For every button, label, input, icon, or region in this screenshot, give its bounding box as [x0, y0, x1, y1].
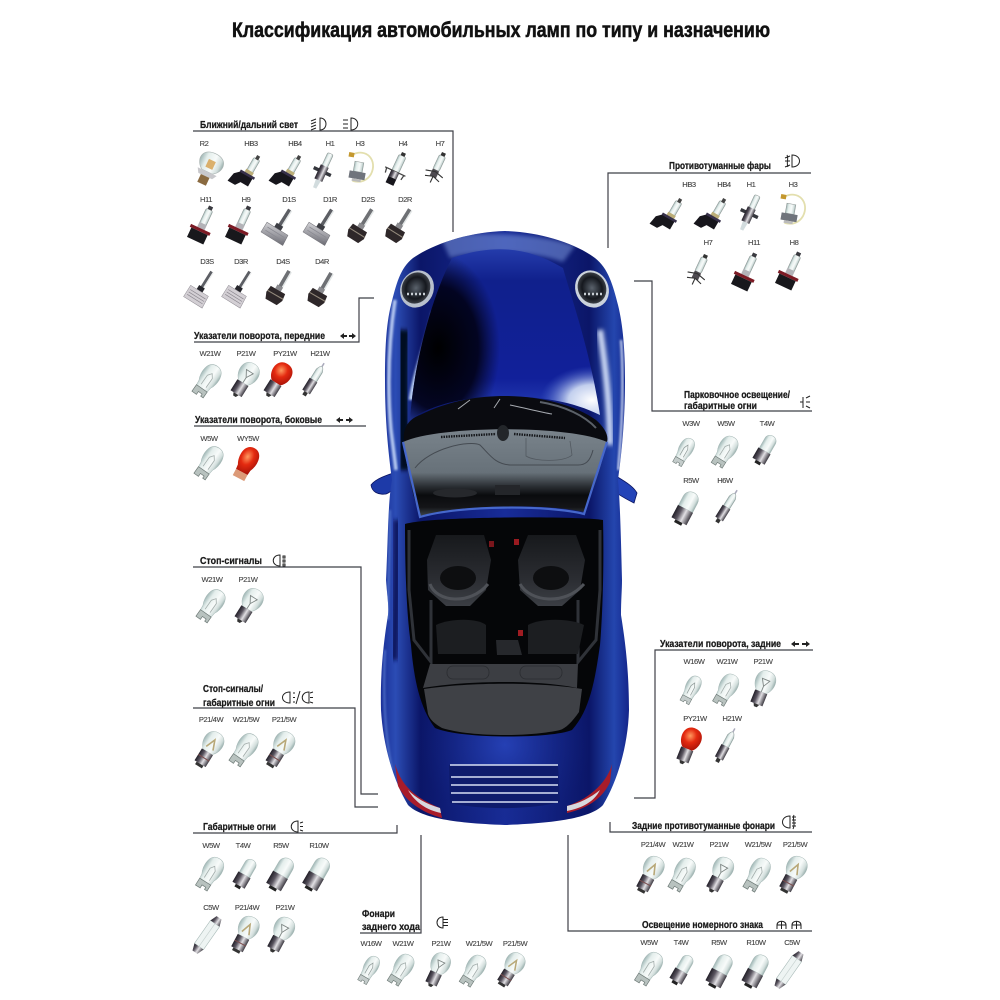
- cabin side sills: [409, 530, 600, 662]
- front seat right: [518, 535, 585, 606]
- bulb P21/4W: [632, 840, 668, 897]
- heading: brake and position lights: Стоп-сигналы/: [203, 684, 263, 695]
- bulb H6W: H6W: [717, 476, 734, 485]
- bulb W21W: W21W: [393, 939, 415, 948]
- bulb HB4: HB4: [288, 139, 302, 148]
- panel: rear turn signals: [634, 639, 813, 798]
- panel: parking and position lights: [634, 281, 812, 528]
- bulb D2R: D2R: [398, 195, 413, 204]
- bulb H7: H7: [704, 238, 713, 247]
- bulb H7: H7: [436, 139, 445, 148]
- bulb W21W: [710, 657, 742, 708]
- bulb R2: [190, 139, 227, 189]
- bulb H21W: [713, 714, 743, 764]
- bulb R2: R2: [200, 139, 209, 148]
- bulb P21W: [702, 840, 737, 897]
- bulb H6W: [713, 476, 741, 525]
- bulb H1: H1: [326, 139, 335, 148]
- bulb W21W: W21W: [200, 349, 222, 358]
- bulb W5W: [632, 938, 667, 988]
- heading: brake lights: Стоп-сигналы: [200, 556, 262, 567]
- bulb D4S: D4S: [276, 257, 290, 266]
- bulb D1S: [261, 195, 301, 246]
- bulb H3: H3: [789, 180, 798, 189]
- icon: turn arrows: [340, 333, 356, 339]
- bulb W21W: [385, 939, 418, 988]
- bulb HB3: [650, 180, 696, 235]
- cowl and wipers: [404, 396, 607, 442]
- bulb D3S: D3S: [200, 257, 214, 266]
- bulb P21W: P21W: [432, 939, 452, 948]
- car illustration, top view: [371, 231, 637, 825]
- bulb D3R: D3R: [234, 257, 249, 266]
- tail light right: [567, 764, 612, 813]
- bulb P21W: [421, 939, 454, 991]
- bulb H21W: [300, 349, 331, 398]
- bulb P21/4W: [190, 715, 228, 772]
- heading: reverse lights: [362, 909, 420, 933]
- bulb H8: [773, 238, 809, 291]
- bulb P21W: [226, 349, 263, 402]
- bulb P21W: P21W: [754, 657, 774, 666]
- panel: low and high beam: [184, 118, 453, 309]
- bulb T4W: [668, 938, 696, 987]
- bulb T4W: T4W: [236, 841, 252, 850]
- bulb W5W: [193, 841, 228, 893]
- bulb W21W: W21W: [673, 840, 695, 849]
- bulb HB3: HB3: [244, 139, 258, 148]
- bulb H7: [684, 238, 715, 288]
- bulb W21W: W21W: [202, 575, 224, 584]
- connector line: [360, 835, 421, 933]
- bulb W5W: W5W: [202, 841, 221, 850]
- connector line: [194, 425, 366, 427]
- panel: reverse lights: [356, 835, 529, 991]
- bulb W16W: [678, 657, 706, 706]
- bulb W21/5W: W21/5W: [233, 715, 260, 724]
- heading: reverse lights: заднего хода: [362, 922, 420, 933]
- icon: parking lamp: [800, 396, 810, 408]
- heading: reverse lights: Фонари: [362, 909, 395, 920]
- bulb D4R: D4R: [315, 257, 330, 266]
- windshield dash detail: [415, 425, 593, 498]
- bulb D3S: [184, 257, 221, 308]
- bulb H7: [422, 139, 453, 186]
- bulb W21/5W: [457, 939, 493, 989]
- connector line: [194, 298, 374, 342]
- bulb H9: H9: [242, 195, 251, 204]
- bulb T4W: T4W: [760, 419, 776, 428]
- bulb P21/5W: P21/5W: [783, 840, 808, 849]
- bulb W16W: W16W: [684, 657, 706, 666]
- bulb D3R: [222, 257, 259, 308]
- panel: fog lights: [608, 155, 811, 292]
- rear deck panel: [423, 664, 578, 688]
- bulb W21W: W21W: [717, 657, 739, 666]
- panel: side turn signals: [192, 414, 366, 483]
- bulb W3W: W3W: [682, 419, 701, 428]
- bulb PY21W: PY21W: [683, 714, 708, 723]
- bulb WY5W: [230, 434, 263, 483]
- icon: turn arrows: [336, 417, 353, 423]
- rear seats: [436, 539, 584, 655]
- heading: brake and position lights: габаритные огни: [203, 697, 275, 709]
- bulb R10W: R10W: [309, 841, 330, 850]
- bulb P21/4W: P21/4W: [641, 840, 666, 849]
- body reflections: [384, 234, 622, 820]
- icon: turn arrows: [791, 641, 810, 647]
- bulb HB4: HB4: [717, 180, 731, 189]
- bulb W21/5W: W21/5W: [745, 840, 772, 849]
- bulb H4: [379, 139, 414, 189]
- bulb W5W: W5W: [717, 419, 736, 428]
- bulb PY21W: [259, 349, 298, 402]
- heading: parking and position lights: Парковочное освещение/: [684, 390, 790, 401]
- heading: front turn signals: Указатели поворота, передние: [194, 331, 325, 342]
- bulb H11: H11: [748, 238, 760, 247]
- bulb W21/5W: W21/5W: [466, 939, 493, 948]
- bulb W5W: [709, 419, 742, 470]
- bulb P21/4W: P21/4W: [199, 715, 224, 724]
- connector line: [634, 281, 812, 411]
- bulb D1R: D1R: [323, 195, 338, 204]
- bulb R5W: R5W: [711, 938, 728, 947]
- bulb H8: H8: [790, 238, 799, 247]
- headlight right: [569, 265, 615, 313]
- panel: brake and position lights: [190, 684, 378, 807]
- bulb H9: [223, 195, 259, 245]
- bulb P21/5W: [775, 840, 811, 897]
- bulb R5W: R5W: [273, 841, 290, 850]
- bulb W3W: [671, 419, 701, 468]
- bulb H1: H1: [747, 180, 756, 189]
- bulb D2R: [383, 195, 418, 245]
- bulb HB4: [694, 180, 731, 235]
- bulb C5W: [772, 938, 806, 990]
- bulb D4S: [263, 257, 297, 307]
- bulb H1: [306, 139, 339, 192]
- bulb C5W: C5W: [203, 903, 220, 912]
- bulb R5W: [704, 938, 736, 991]
- bulb R5W: R5W: [683, 476, 700, 485]
- bulb T4W: [751, 419, 779, 467]
- icon: rear fog lamp: [782, 815, 796, 829]
- connector line: [193, 825, 397, 833]
- panel: license plate lights: [568, 835, 812, 991]
- bulb R10W: [740, 938, 772, 991]
- bulb H3: [776, 180, 807, 226]
- bulb C5W: [190, 903, 224, 955]
- heading: parking and position lights: габаритные огни: [684, 400, 757, 412]
- bulb P21W: [263, 903, 298, 957]
- bulb P21/5W: P21/5W: [272, 715, 297, 724]
- icon: high beam: [343, 118, 358, 130]
- bulb W21/5W: [740, 840, 774, 894]
- tonneau cover: [424, 684, 582, 735]
- heading: license plate lights: Освещение номерного знака: [642, 920, 763, 931]
- cabin: [405, 517, 603, 737]
- connector line: [193, 567, 378, 794]
- title: Классификация автомобильных ламп по типу и назначению: [232, 19, 770, 42]
- bulb P21W: P21W: [276, 903, 296, 912]
- engine vent: [449, 765, 560, 808]
- heading: side turn signals: Указатели поворота, боковые: [195, 414, 322, 426]
- heading: rear turn signals: Указатели поворота, задние: [660, 639, 781, 650]
- hood: [410, 249, 600, 418]
- bulb HB4: [269, 139, 306, 192]
- icon: fog lamp: [785, 155, 800, 167]
- bulb P21/5W: P21/5W: [503, 939, 528, 948]
- panel: rear fog lights: [610, 815, 812, 897]
- bulb P21W: [746, 657, 779, 710]
- bulb WY5W: WY5W: [237, 434, 260, 443]
- bulb D1S: D1S: [282, 195, 296, 204]
- bulb D1R: [303, 195, 343, 246]
- bulb PY21W: [672, 714, 708, 767]
- bulb D4R: [305, 257, 339, 309]
- bulb H3: [344, 139, 375, 184]
- bulb C5W: C5W: [784, 938, 801, 947]
- connector line: [193, 708, 378, 807]
- bulb P21W: P21W: [239, 575, 259, 584]
- bulb P21/5W: [493, 939, 529, 991]
- bulb R10W: [301, 841, 333, 894]
- connector line: [610, 822, 812, 832]
- tail light left: [395, 764, 442, 818]
- bulb H21W: H21W: [310, 349, 331, 358]
- heading: fog lights: Противотуманные фары: [669, 160, 771, 172]
- connector line: [634, 650, 813, 798]
- bulb H11: H11: [200, 195, 212, 204]
- bulb T4W: [231, 841, 259, 891]
- icon: plate lamps: [777, 921, 801, 929]
- bulb H21W: H21W: [722, 714, 743, 723]
- connector line: [193, 131, 453, 232]
- bulb HB3: [228, 139, 265, 192]
- bulb P21/4W: P21/4W: [235, 903, 260, 912]
- bulb D2S: D2S: [361, 195, 375, 204]
- connector line: [568, 835, 812, 931]
- headlight left: [394, 265, 440, 313]
- icon: brake and position lamp: [282, 691, 313, 704]
- bulb W21/5W: [227, 715, 262, 769]
- bulb W21W: [665, 840, 699, 894]
- bulb W21W: [194, 575, 229, 625]
- connector line: [608, 173, 811, 248]
- bulb W5W: [192, 434, 227, 482]
- heading: brake and position lights: [203, 684, 275, 709]
- bulb R5W: [265, 841, 297, 894]
- icon: reverse lamp: [437, 917, 448, 928]
- heading: rear fog lights: Задние противотуманные фонари: [632, 820, 775, 832]
- bulb PY21W: PY21W: [273, 349, 298, 358]
- car body: [381, 231, 629, 825]
- bulb R10W: R10W: [746, 938, 767, 947]
- front seat left: [427, 535, 491, 606]
- windshield: [403, 429, 607, 516]
- bulb H11: [729, 238, 765, 292]
- left mirror: [371, 470, 403, 494]
- panel: position lights: [190, 821, 397, 957]
- bulb W21W: [190, 349, 225, 400]
- windshield frame: [403, 442, 607, 517]
- icon: low beam: [311, 118, 326, 130]
- bulb P21/4W: [227, 903, 263, 957]
- bulb HB3: HB3: [682, 180, 696, 189]
- icon: brake lamp: [273, 555, 285, 566]
- bulb W5W: W5W: [200, 434, 219, 443]
- heading: low and high beam: Ближний/дальний свет: [200, 120, 298, 131]
- bulb H3: H3: [356, 139, 365, 148]
- bulb R5W: [670, 476, 702, 528]
- bulb W16W: [356, 939, 383, 986]
- bulb H1: [733, 180, 766, 234]
- bulb H4: H4: [399, 139, 408, 148]
- panel: brake lights: [193, 555, 378, 794]
- bulb P21W: P21W: [710, 840, 730, 849]
- panel: front turn signals: [190, 298, 374, 402]
- bulb D2S: [345, 195, 380, 245]
- bulb P21W: P21W: [237, 349, 257, 358]
- right mirror: [608, 471, 637, 503]
- bulb H11: [185, 195, 221, 245]
- bulb W16W: W16W: [361, 939, 383, 948]
- bulb P21W: [230, 575, 267, 628]
- bulb T4W: T4W: [674, 938, 690, 947]
- bulb W5W: W5W: [640, 938, 659, 947]
- heading: parking and position lights: [684, 390, 790, 412]
- icon: position lamp: [291, 821, 303, 832]
- bulb P21/5W: [261, 715, 299, 772]
- heading: position lights: Габаритные огни: [203, 821, 276, 833]
